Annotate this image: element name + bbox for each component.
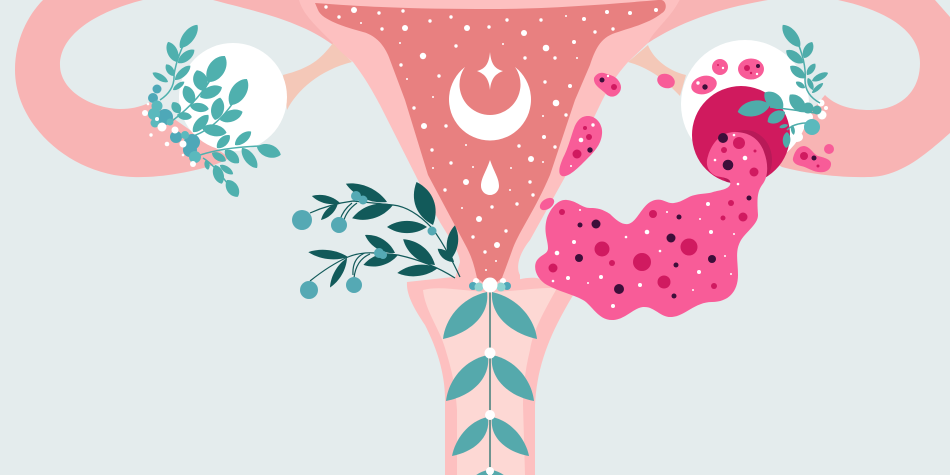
dark green branch lower <box>300 230 455 299</box>
left teal plant <box>151 21 283 200</box>
endometrioma spill <box>535 132 767 320</box>
lesion: elongated on uterine wall <box>559 116 602 176</box>
icon: crescent moon <box>449 67 531 140</box>
right ovary <box>681 40 809 168</box>
spill crimson spots <box>548 137 758 289</box>
lesion: upper uterine wall <box>594 73 621 97</box>
central vine leaves <box>443 292 537 475</box>
left ligament <box>283 43 352 110</box>
left plant flowers <box>142 84 201 167</box>
right fallopian tube <box>648 0 950 177</box>
lesion: right tube <box>793 146 831 172</box>
right ligament <box>628 45 686 96</box>
central vine buds <box>469 278 511 475</box>
right teal plant <box>736 21 829 148</box>
cervix and vagina outer <box>407 277 575 475</box>
dark green branch upper <box>292 178 460 277</box>
lesion: small ovals <box>538 71 834 213</box>
icon: four point star <box>477 52 503 90</box>
speckle dots in cavity <box>324 5 658 271</box>
vagina inner <box>423 288 557 475</box>
left fallopian tube <box>15 0 333 177</box>
left ovary <box>179 43 287 151</box>
uterus outer wall <box>298 0 682 285</box>
central vine stem <box>489 285 491 475</box>
spill white spots <box>552 134 747 308</box>
ruptured ovarian cyst <box>692 86 790 190</box>
uterine cavity <box>315 0 666 288</box>
spill dark spots <box>575 133 752 298</box>
cysts on right ovary <box>689 58 764 97</box>
icon: drop <box>481 160 499 195</box>
right plant white buds <box>791 100 828 142</box>
right plant teal bud <box>804 119 820 135</box>
